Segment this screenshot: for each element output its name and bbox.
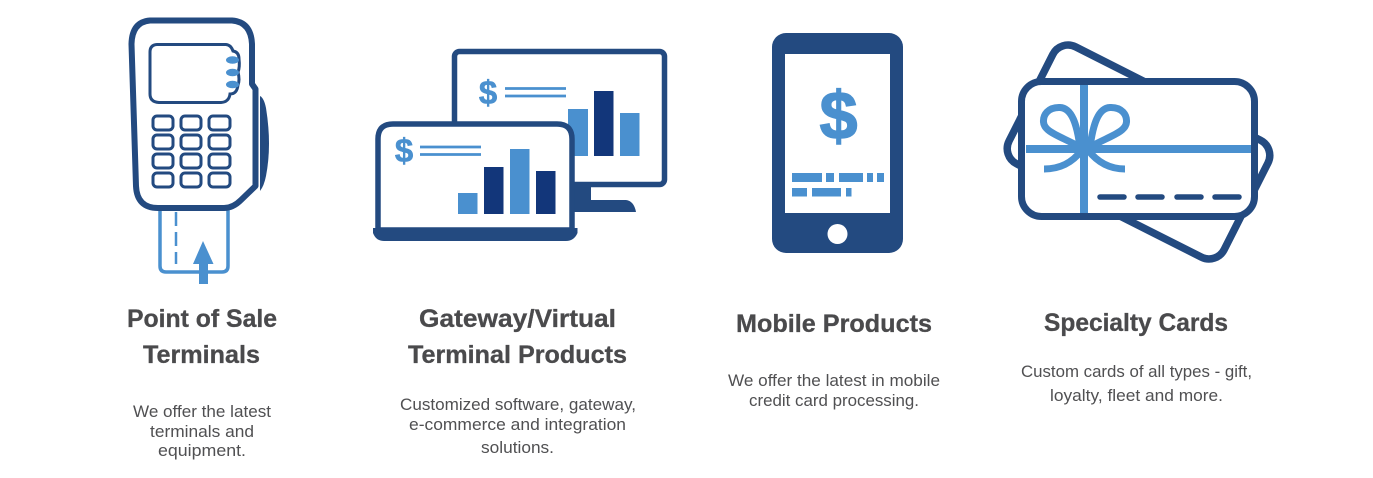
icon: mobile phone [772, 33, 903, 253]
front card [1022, 82, 1254, 216]
ribbon [1026, 85, 1251, 213]
icon: desktop monitor and laptop [373, 52, 664, 241]
heading: Gateway/Virtual Terminal Products: Gateway/Virtual [419, 305, 616, 333]
heading: Gateway/Virtual Terminal Products: Terminal Products [408, 341, 627, 369]
heading: Gateway/Virtual Terminal Products [408, 305, 627, 369]
heading: Point of Sale Terminals [127, 305, 277, 369]
text: specialty cards description [1021, 363, 1252, 405]
monitor stand [573, 180, 636, 212]
laptop bars [458, 149, 556, 214]
text: gateway description: Customized software, gateway, [400, 396, 636, 414]
heading: Point of Sale Terminals: Terminals [143, 341, 260, 369]
laptop [378, 124, 572, 230]
laptop base [373, 228, 578, 241]
heading: Mobile Products: Mobile Products [736, 310, 932, 338]
text: point of sale description: equipment. [158, 442, 246, 460]
side card reader [260, 96, 269, 191]
text: mobile description: credit card processing. [749, 392, 919, 410]
terminal body [132, 20, 256, 208]
icon: gift cards [1001, 39, 1276, 265]
monitor dollar sign: $ [479, 74, 497, 111]
monitor [454, 52, 664, 184]
home button [828, 224, 848, 244]
text: point of sale description [133, 403, 271, 460]
text: point of sale description: We offer the latest [133, 403, 271, 421]
laptop text lines [420, 147, 481, 154]
card being inserted [160, 208, 228, 272]
screen buttons [226, 56, 239, 88]
text: specialty cards description: loyalty, fleet and more. [1050, 387, 1223, 405]
laptop dollar sign: $ [395, 132, 413, 169]
keypad [153, 116, 230, 187]
heading: Point of Sale Terminals: Point of Sale [127, 305, 277, 333]
icon: point of sale terminal [132, 20, 269, 284]
screen [150, 44, 239, 102]
text: specialty cards description: Custom cards of all types - gift, [1021, 363, 1252, 381]
arrow [193, 241, 214, 284]
text: mobile description [728, 372, 940, 410]
phone screen [785, 54, 890, 213]
phone dollar sign: $ [820, 78, 857, 154]
card number dashes [1100, 194, 1239, 200]
monitor text lines [505, 88, 566, 96]
text: mobile description: We offer the latest in mobile [728, 372, 940, 390]
phone text bars [792, 173, 884, 196]
text: gateway description: solutions. [481, 439, 554, 457]
heading: Specialty Cards: Specialty Cards [1044, 309, 1228, 337]
phone body [772, 33, 903, 253]
back card [1001, 39, 1276, 265]
text: gateway description [400, 396, 636, 457]
text: gateway description: e-commerce and integration [409, 416, 626, 434]
monitor bars [568, 91, 640, 156]
text: point of sale description: terminals and [150, 423, 254, 441]
